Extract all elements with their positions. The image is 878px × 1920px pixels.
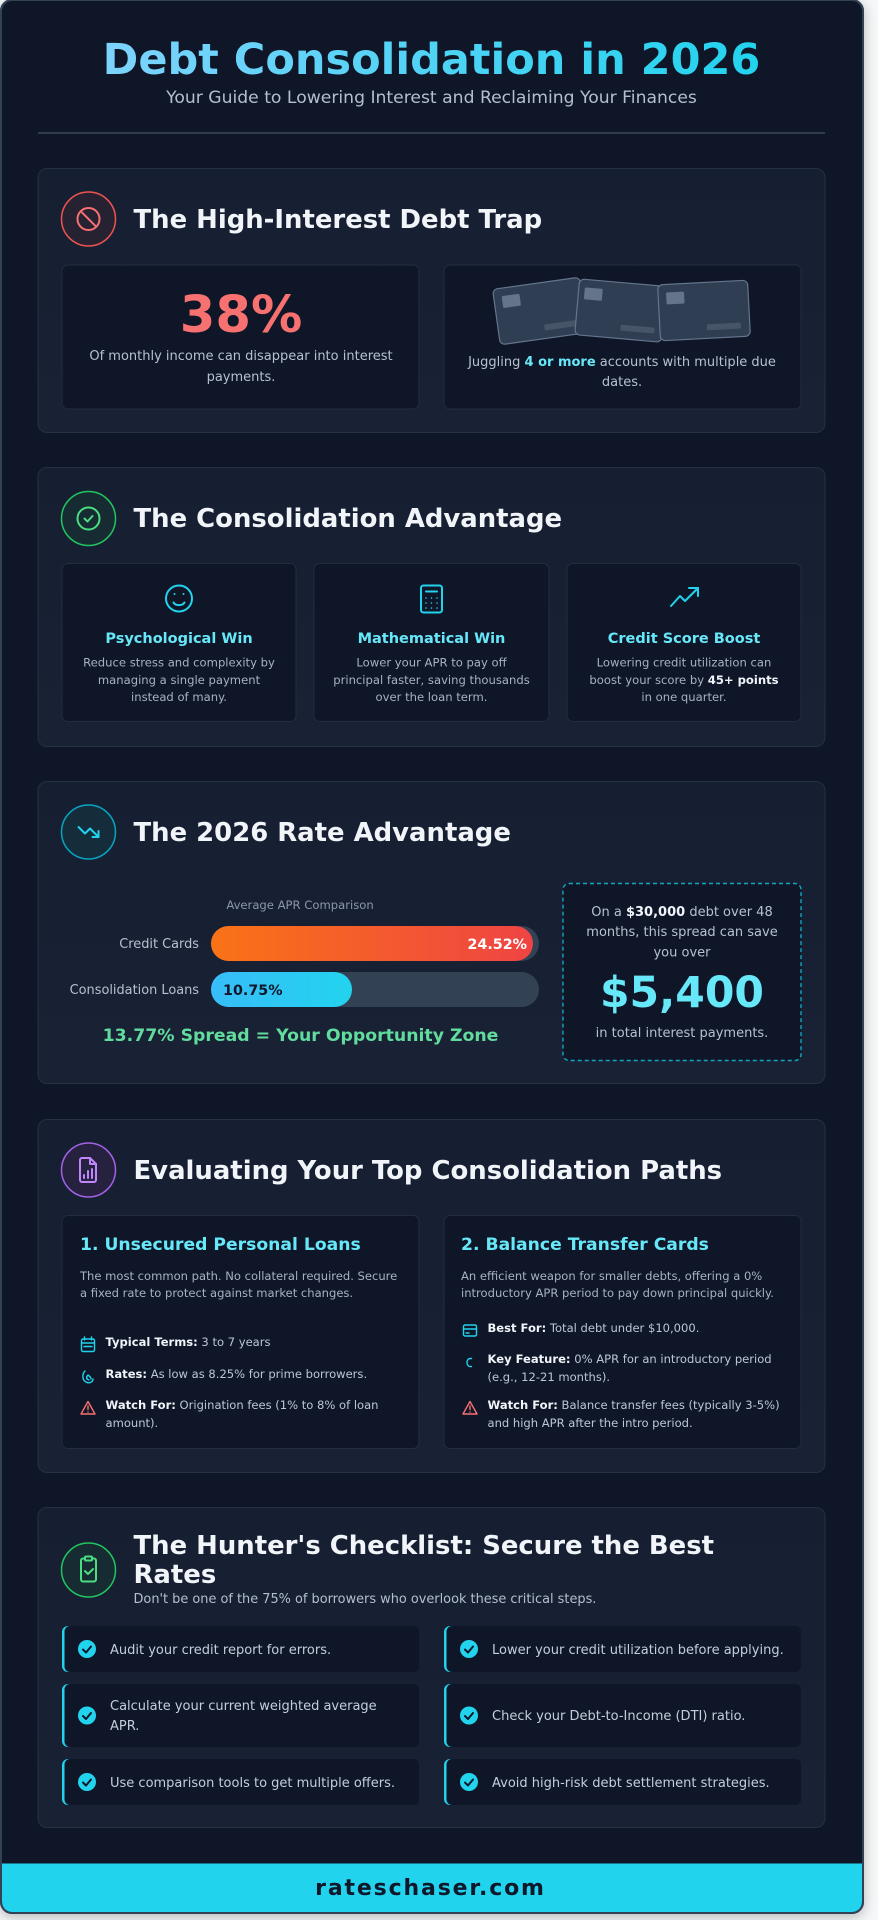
checklist item <box>62 1626 419 1672</box>
icon: check circle <box>62 492 116 546</box>
card text: instead of many. <box>131 690 227 704</box>
card title: Mathematical Win <box>358 631 505 647</box>
spread callout text: 13.77% Spread = Your Opportunity Zone <box>103 1026 498 1046</box>
panel: the high-interest debt trap <box>38 168 825 432</box>
panel: the consolidation advantage <box>38 468 825 746</box>
checklist item: Calculate your current weighted average <box>110 1699 377 1714</box>
card: psychological win <box>62 564 296 722</box>
card text: managing a single payment <box>98 673 261 687</box>
card text: Lower your APR to pay off <box>356 656 508 670</box>
icon: trending down <box>62 805 116 859</box>
item: watch for: Watch For: Origination fees (1% to 8% of loan <box>106 1398 378 1412</box>
callout: savings <box>563 884 801 1060</box>
bar: credit cards <box>119 926 539 961</box>
checklist item <box>444 1759 801 1805</box>
item: watch for: amount). <box>106 1416 158 1430</box>
heading: The Consolidation Advantage <box>134 504 562 534</box>
item: typical terms: Typical Terms: 3 to 7 years <box>106 1335 271 1349</box>
stat caption: payments. <box>207 370 275 385</box>
footer <box>2 1864 862 1912</box>
bar: consolidation loans <box>70 972 539 1007</box>
icon: smile <box>166 586 192 612</box>
callout footer text: in total interest payments. <box>596 1026 768 1041</box>
card text: Lowering credit utilization can <box>597 656 771 670</box>
heading: The High-Interest Debt Trap <box>134 205 542 235</box>
heading: Evaluating Your Top Consolidation Paths <box>134 1156 722 1186</box>
heading: The 2026 Rate Advantage <box>134 818 511 848</box>
item: watch for: and high APR after the intro period. <box>488 1416 693 1430</box>
bar chart: average APR comparison <box>70 898 539 1046</box>
item: watch for <box>81 1398 378 1430</box>
card: unsecured personal loans <box>62 1216 419 1448</box>
caption: dates. <box>602 375 642 390</box>
callout text: months, this spread can save <box>586 925 778 940</box>
checklist item <box>444 1684 801 1747</box>
title: Debt Consolidation in 2026 <box>103 35 760 85</box>
item: watch for: Watch For: Balance transfer fees (typically 3-5%) <box>488 1398 780 1412</box>
card title: Psychological Win <box>105 631 253 647</box>
panel: evaluating consolidation paths <box>38 1120 825 1472</box>
callout text: you over <box>653 946 711 960</box>
card text: a fixed rate to protect against market changes. <box>80 1286 353 1300</box>
card: credit score boost <box>567 564 801 722</box>
icon: file chart <box>62 1143 116 1197</box>
checklist item <box>444 1626 801 1672</box>
card: mathematical win <box>314 564 549 722</box>
card text: in one quarter. <box>641 690 727 704</box>
checklist item: Audit your credit report for errors. <box>110 1643 331 1658</box>
icon: trending up <box>671 588 698 606</box>
bar: credit cards: 24.52% <box>467 937 527 953</box>
item: key feature: (e.g., 12-21 months). <box>488 1370 610 1384</box>
item: key feature <box>467 1352 772 1384</box>
card title: Credit Score Boost <box>608 631 760 647</box>
bar: consolidation loans: Consolidation Loans <box>70 983 199 998</box>
heading: Rates <box>134 1560 216 1590</box>
item: watch for <box>463 1398 780 1430</box>
bar: credit cards: Credit Cards <box>119 937 199 952</box>
item: key feature: Key Feature: 0% APR for an introductory period <box>488 1352 772 1366</box>
card text: Reduce stress and complexity by <box>83 656 275 670</box>
icon: prohibited sign <box>62 192 116 246</box>
checklist item: Lower your credit utilization before applying. <box>492 1643 784 1658</box>
savings amount: $5,400 <box>600 969 764 1018</box>
checklist item: Use comparison tools to get multiple offers. <box>110 1776 395 1791</box>
item: rates: Rates: As low as 8.25% for prime borrowers. <box>106 1367 367 1381</box>
stat card: 38 percent <box>62 265 419 409</box>
card text: over the loan term. <box>376 690 487 704</box>
icon: clipboard check <box>62 1543 116 1597</box>
card text: The most common path. No collateral required. Secure <box>79 1269 397 1283</box>
icon: calculator <box>421 586 442 612</box>
checklist item: Check your Debt-to-Income (DTI) ratio. <box>492 1709 745 1724</box>
heading: The Hunter's Checklist: Secure the Best <box>134 1531 714 1561</box>
card text: boost your score by 45+ points <box>589 673 779 687</box>
panel: the hunter's checklist <box>38 1508 825 1828</box>
subheading: Don't be one of the 75% of borrowers who overlook these critical steps. <box>134 1592 596 1607</box>
card text: An efficient weapon for smaller debts, offering a 0% <box>461 1269 762 1283</box>
stat caption: Of monthly income can disappear into interest <box>89 349 393 364</box>
panel: the 2026 rate advantage <box>38 782 825 1084</box>
bar: consolidation loans: 10.75% <box>223 983 283 999</box>
callout text: On a $30,000 debt over 48 <box>591 905 773 920</box>
caption: Juggling 4 or more accounts with multiple due <box>468 355 776 370</box>
card title: 2. Balance Transfer Cards <box>461 1235 709 1255</box>
header <box>103 35 760 108</box>
stat card: juggling accounts <box>444 265 801 409</box>
illustration: three credit cards <box>493 277 750 345</box>
subtitle: Your Guide to Lowering Interest and Reclaiming Your Finances <box>165 88 697 108</box>
checklist item: Avoid high-risk debt settlement strategies. <box>492 1776 770 1791</box>
item: best for: Best For: Total debt under $10,000. <box>488 1321 699 1335</box>
chart title: Average APR Comparison <box>226 898 374 912</box>
stat number: 38% <box>180 285 302 345</box>
card: balance transfer cards <box>444 1216 801 1448</box>
checklist item: APR. <box>110 1719 139 1734</box>
card text: principal faster, saving thousands <box>333 673 530 687</box>
checklist item <box>62 1684 419 1747</box>
card title: 1. Unsecured Personal Loans <box>80 1235 361 1255</box>
checklist item <box>62 1759 419 1805</box>
card text: introductory APR period to pay down principal quickly. <box>461 1286 774 1300</box>
footer: rateschaser.com <box>315 1876 546 1901</box>
